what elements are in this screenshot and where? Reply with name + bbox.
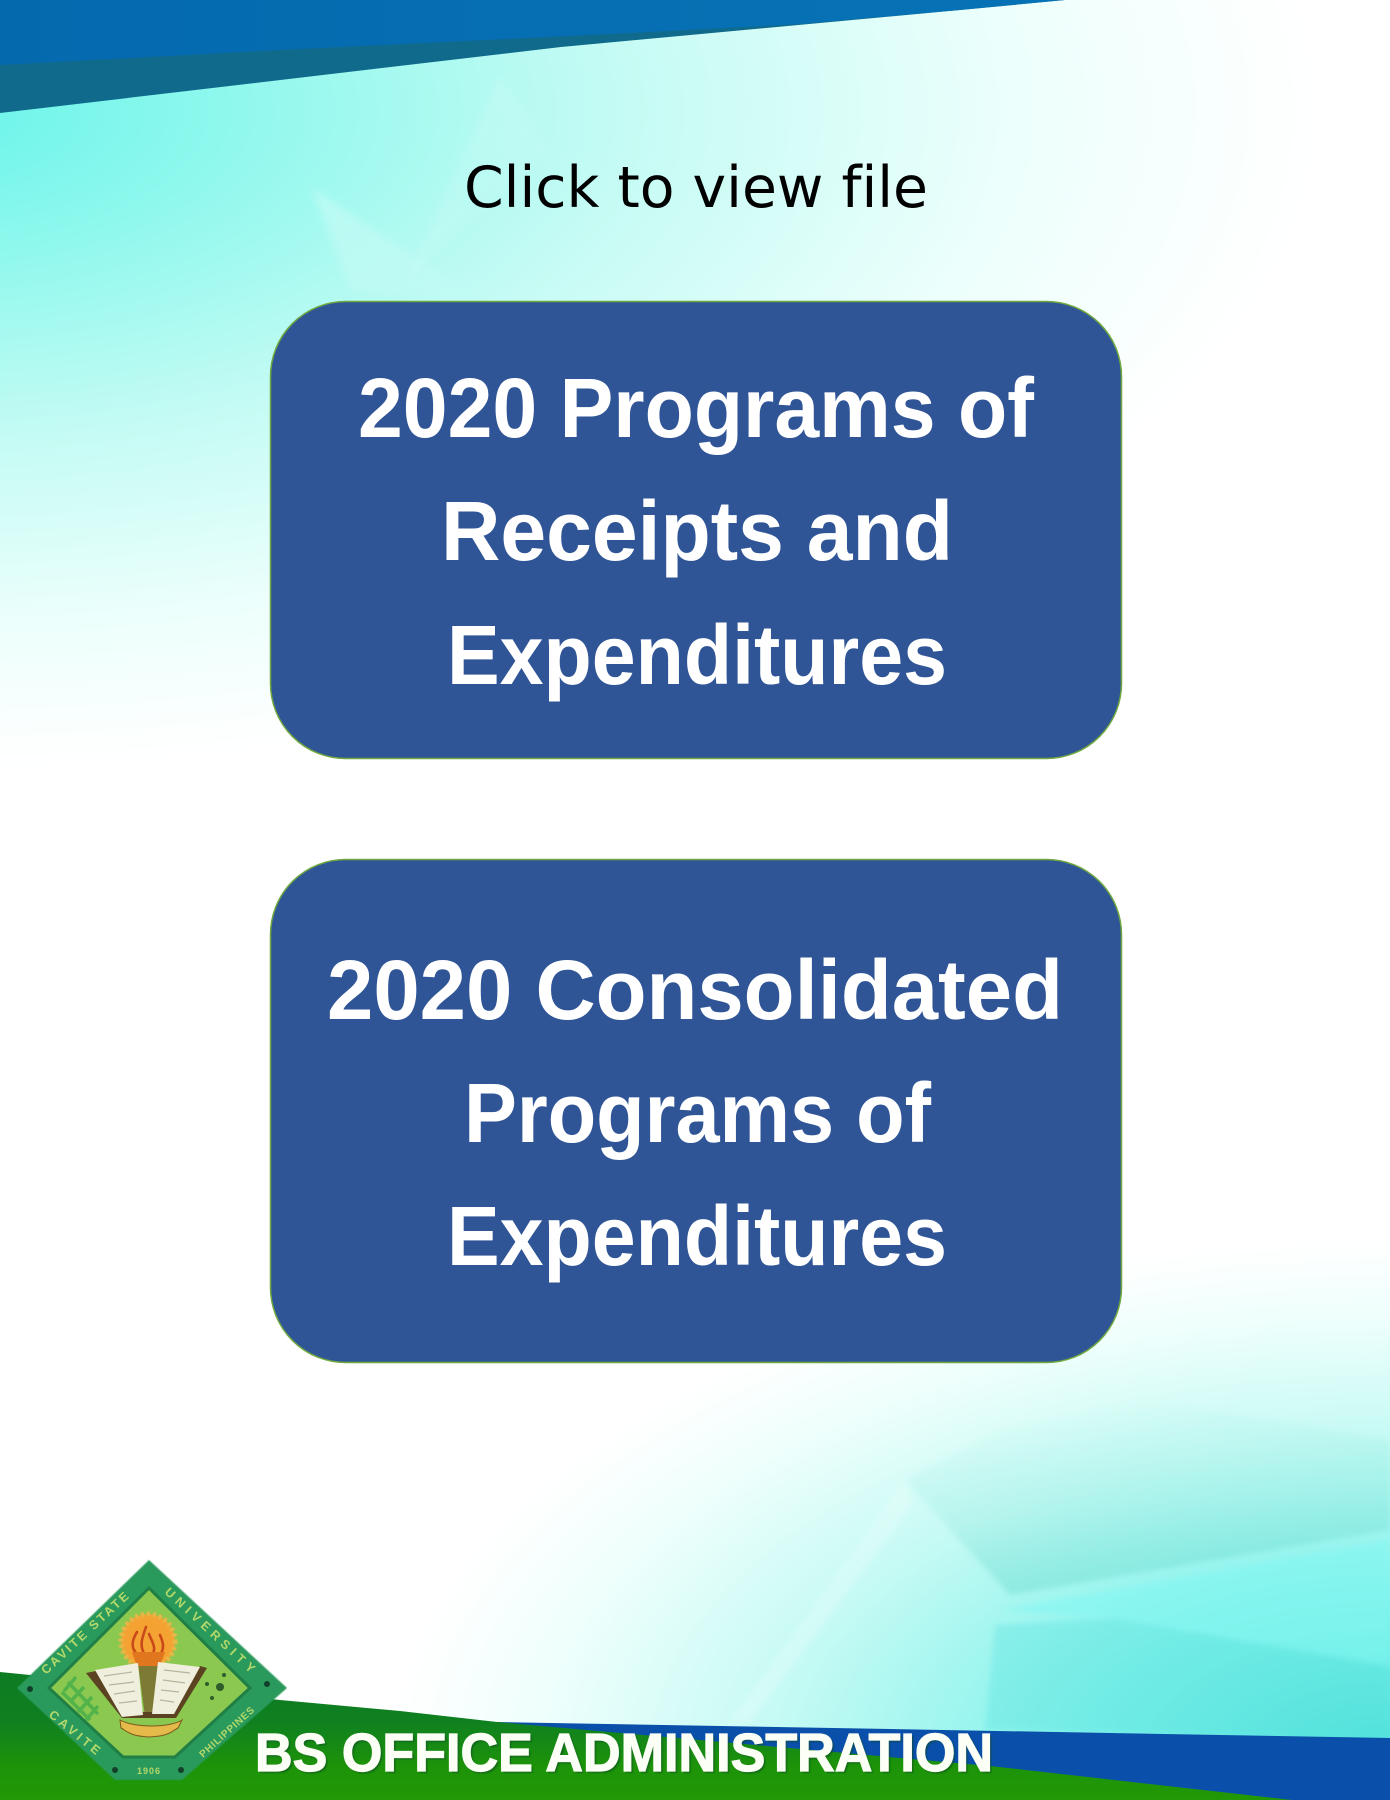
button: 2020 Consolidated Programs of Expenditures: 2020 Consolidated [327,943,1063,1037]
seal lettering: UNIVERSITY [166,1587,256,1672]
button: 2020 Programs of Receipts and Expenditures: 2020 Programs of [358,361,1035,455]
icon: wheat [62,1677,98,1720]
button: 2020 Programs of Receipts and Expenditures: Expenditures [447,608,947,702]
seal corner dots [27,1681,270,1773]
footer banner: green and blue bands [0,1672,1390,1800]
button: 2020 Consolidated Programs of Expenditures: Expenditures [447,1189,947,1283]
logo: Cavite State University seal [17,1560,288,1780]
prompt text: click to view file: Click to view file [464,155,928,221]
seal inner field [49,1588,250,1757]
icon: laurel base [120,1720,182,1737]
seal lettering: CAVITE STATE [42,1592,129,1674]
seal lettering: 1906 [137,1766,161,1776]
button: 2020 Programs of Receipts and Expenditures: Receipts and [441,484,953,578]
icon: atom dots [205,1673,226,1700]
seal lettering: CAVITE [50,1711,101,1755]
footer title: BS Office Administration: BS OFFICE ADMINISTRATION [257,1725,995,1785]
icon: open book [86,1662,207,1718]
icon: sun [121,1614,175,1668]
seal outer border [17,1560,287,1780]
top banner: blue and teal wedge [0,0,1065,113]
button: 2020 Programs of Receipts and Expenditures [270,302,1122,758]
seal lettering: PHILIPPINES [199,1707,254,1758]
button: 2020 Consolidated Programs of Expenditures [270,860,1122,1362]
icon: flame [133,1627,163,1655]
seal lettering [42,1587,256,1776]
footer title: BS Office Administration: BS OFFICE ADMINISTRATION [255,1723,993,1783]
icon: torch [138,1664,158,1716]
button: 2020 Consolidated Programs of Expenditures: Programs of [464,1066,932,1160]
